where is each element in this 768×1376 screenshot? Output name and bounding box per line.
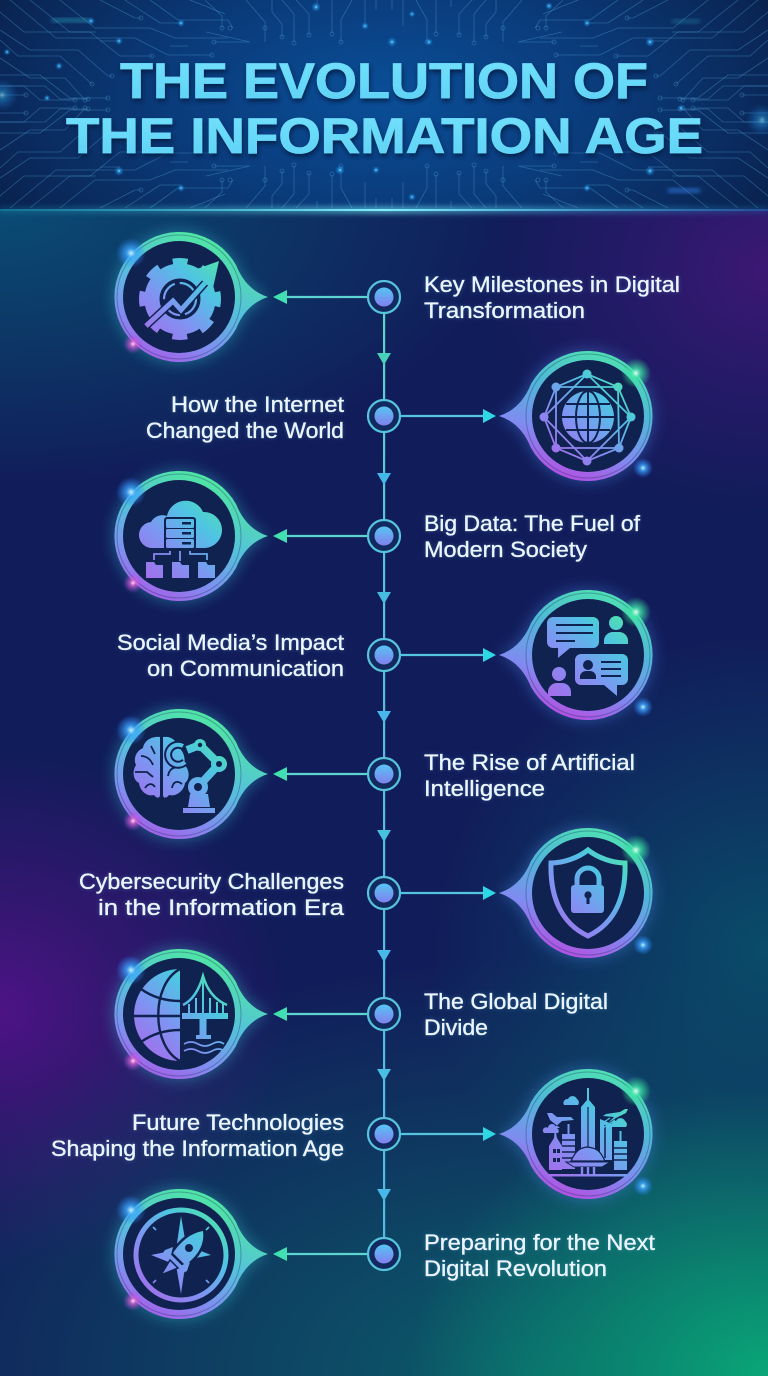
badge 7: split globe and bridge — [114, 949, 268, 1079]
label: next revolution — [424, 1230, 656, 1281]
label: key milestones — [424, 272, 680, 323]
icon: shield and lock — [551, 850, 625, 936]
label: artificial intelligence: The Rise of Artificial — [424, 750, 635, 775]
badge 9: compass and rocket — [114, 1189, 268, 1319]
label: big data — [424, 511, 641, 562]
label: big data: Big Data: The Fuel of — [424, 511, 641, 536]
icon: globe and network — [540, 370, 636, 466]
label: key milestones: Transformation — [424, 298, 585, 323]
badge 2: globe network — [499, 351, 653, 481]
label: next revolution: Digital Revolution — [424, 1256, 607, 1281]
label: internet: Changed the World — [146, 418, 344, 443]
title: THE INFORMATION AGE — [66, 108, 703, 164]
badge 4: chat bubbles — [499, 590, 653, 720]
label: digital divide: Divide — [424, 1015, 488, 1040]
label: social media: on Communication — [147, 656, 344, 681]
label: cybersecurity — [79, 869, 345, 920]
label: next revolution: Preparing for the Next — [424, 1230, 656, 1255]
label: digital divide: The Global Digital — [424, 989, 608, 1014]
title: THE EVOLUTION OF — [120, 53, 648, 109]
badge 3: cloud server — [114, 471, 268, 601]
timeline nodes — [368, 281, 400, 1270]
icon: gear with arrow — [143, 261, 219, 336]
title — [66, 53, 703, 164]
timeline spine with downward arrows — [377, 313, 391, 1238]
label: key milestones: Key Milestones in Digital — [424, 272, 680, 297]
label: social media: Social Media’s Impact — [117, 630, 345, 655]
label: future technologies: Shaping the Information Age — [51, 1136, 344, 1161]
icon: compass with rocket — [136, 1210, 226, 1300]
label: digital divide — [424, 989, 608, 1040]
label: internet — [146, 392, 345, 443]
label: social media — [117, 630, 345, 681]
label: cybersecurity: in the Information Era — [98, 895, 345, 920]
icon: half globe and bridge — [134, 969, 228, 1061]
badge 6: shield with padlock — [499, 828, 653, 958]
label: internet: How the Internet — [171, 392, 345, 417]
label: future technologies — [51, 1110, 344, 1161]
label: future technologies: Future Technologies — [132, 1110, 344, 1135]
label: cybersecurity: Cybersecurity Challenges — [79, 869, 344, 894]
label: artificial intelligence — [424, 750, 635, 801]
icon: brain and robot arm — [134, 737, 227, 813]
icon: skyline, planes and clouds — [543, 1088, 628, 1176]
badge 1: gear and rising arrow — [114, 232, 268, 362]
label: big data: Modern Society — [424, 537, 588, 562]
icon: cloud, server and folders — [139, 501, 222, 578]
icon: people and speech bubbles — [547, 616, 628, 696]
label: artificial intelligence: Intelligence — [424, 776, 545, 801]
connector arrows pointing to icons — [273, 290, 496, 1261]
badge 5: brain and robot arm — [114, 709, 268, 839]
header banner with circuit board pattern — [0, 0, 768, 214]
badge 8: future city — [499, 1069, 653, 1199]
